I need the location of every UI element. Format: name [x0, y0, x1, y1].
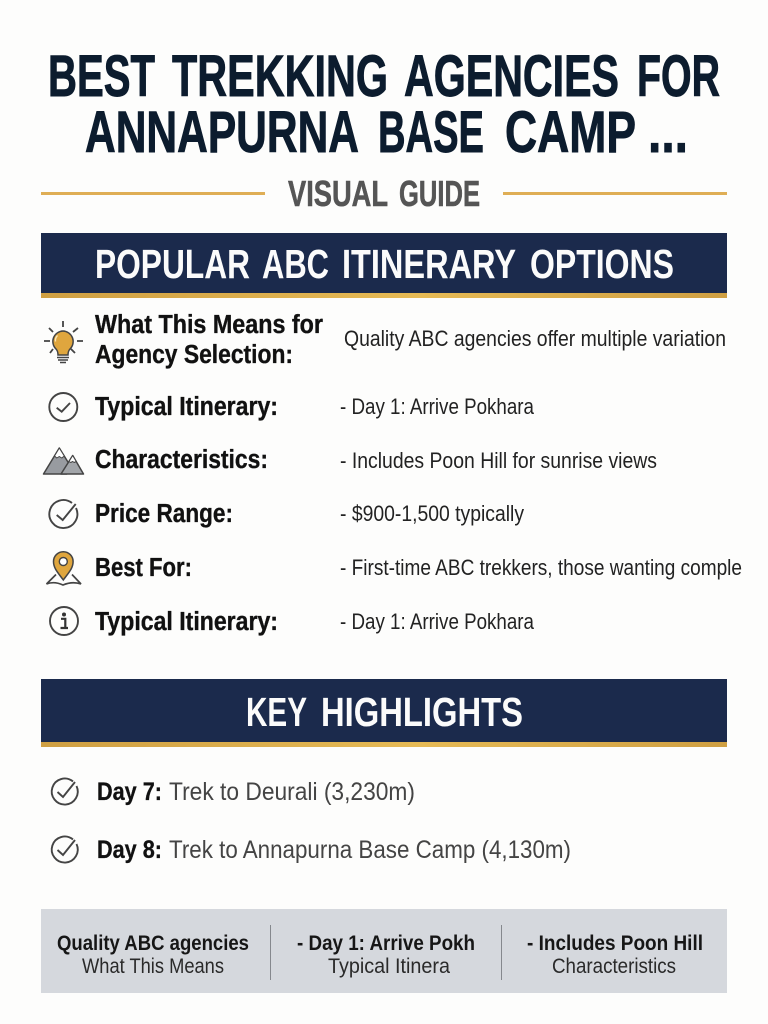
row: typical itinerary: [49, 393, 535, 421]
section banner: popular ABC itinerary options: ITINERARY: [342, 241, 516, 287]
section banner: key highlights: HIGHLIGHTS: [321, 689, 523, 735]
icon: check circle: [52, 779, 78, 805]
summary: what this means: [57, 932, 249, 978]
summary: typical itinerary: Typical Itinera: [328, 955, 450, 978]
row: best for: [46, 552, 742, 585]
row: characteristics: - Includes Poon Hill for sunrise views: [340, 448, 657, 473]
icon: info circle: [50, 607, 78, 635]
title: BEST: [48, 44, 155, 109]
summary: what this means: Quality ABC agencies: [57, 932, 249, 955]
row: what this means: What This Means for: [95, 311, 323, 339]
icon: check circle: [49, 500, 77, 528]
title: ANNAPURNA: [85, 100, 359, 165]
row: typical itinerary: - Day 1: Arrive Pokhara: [340, 394, 535, 419]
row: typical itinerary: Typical Itinerary:: [95, 393, 278, 421]
row: price range: Price Range:: [95, 500, 233, 528]
section banner: popular ABC itinerary options: POPULAR: [95, 241, 250, 287]
section banner: key highlights: [41, 679, 727, 747]
highlight: day 8: Day 8:: [97, 836, 162, 864]
row: characteristics: [44, 446, 657, 474]
row: typical itinerary repeat: [50, 607, 535, 636]
summary: typical itinerary: - Day 1: Arrive Pokh: [297, 932, 475, 955]
subtitle: visual guide: GUIDE: [399, 173, 480, 214]
section banner: popular ABC itinerary options: OPTIONS: [530, 241, 674, 287]
icon: map pin: [46, 552, 81, 585]
row: typical itinerary repeat: Typical Itinerary:: [95, 608, 278, 636]
title: CAMP: [505, 100, 636, 165]
highlight: day 7: [52, 778, 415, 806]
summary: characteristics: Characteristics: [552, 955, 676, 978]
row: best for: Best For:: [95, 554, 192, 582]
highlight: day 7: Trek to Deurali (3,230m): [169, 778, 415, 806]
title: [48, 44, 720, 165]
icon: check circle: [52, 837, 78, 863]
icon: light bulb: [44, 321, 83, 362]
section banner: key highlights: KEY: [246, 689, 307, 735]
panel: itinerary rows: [44, 311, 742, 636]
title: TREKKING: [172, 44, 388, 109]
summary: what this means: What This Means: [82, 955, 224, 978]
subtitle: visual guide: VISUAL: [288, 173, 388, 214]
panel: highlights list: [52, 778, 571, 864]
section banner: popular ABC itinerary options: [41, 233, 727, 298]
row: what this means: Quality ABC agencies offer multiple variation: [344, 326, 726, 351]
highlight: day 8: Trek to Annapurna Base Camp (4,130m): [169, 836, 571, 864]
subtitle: visual guide: [41, 173, 727, 214]
row: what this means: [44, 311, 726, 369]
title: FOR: [637, 44, 720, 109]
icon: check circle: [49, 393, 77, 421]
highlight: day 7: Day 7:: [97, 778, 162, 806]
row: price range: [49, 500, 524, 528]
summary: typical itinerary: [297, 932, 475, 978]
summary: characteristics: [527, 932, 703, 978]
row: what this means: Agency Selection:: [95, 341, 293, 369]
title: ...: [648, 100, 688, 165]
icon: mountains: [44, 448, 84, 474]
row: characteristics: Characteristics:: [95, 446, 268, 474]
title: BASE: [378, 100, 484, 165]
row: price range: - $900-1,500 typically: [340, 501, 524, 526]
section banner: popular ABC itinerary options: ABC: [262, 241, 329, 287]
row: typical itinerary repeat: - Day 1: Arrive Pokhara: [340, 609, 535, 634]
summary: characteristics: - Includes Poon Hill: [527, 932, 703, 955]
title: AGENCIES: [404, 44, 619, 109]
panel: summary bar: [41, 909, 727, 993]
